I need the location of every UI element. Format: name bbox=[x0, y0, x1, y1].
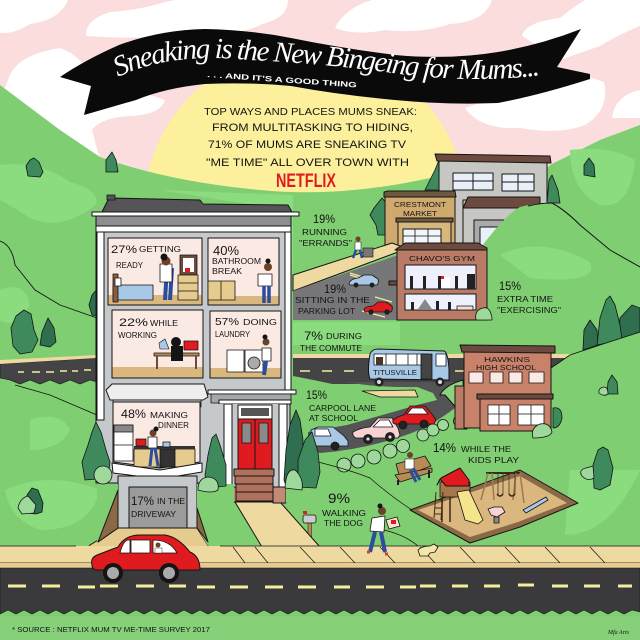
label: during the commute: THE COMMUTE bbox=[300, 344, 362, 353]
label: sitting in the parking lot bbox=[295, 282, 370, 316]
left pair of trees bbox=[11, 310, 56, 354]
room: while working: WORKING bbox=[118, 331, 157, 340]
lawn below road bbox=[293, 376, 551, 570]
playground sand bbox=[410, 470, 578, 543]
room: bathroom break: BREAK bbox=[212, 267, 243, 276]
intro text: "ME TIME" ALL OVER TOWN WITH bbox=[206, 157, 409, 169]
tree near the house roof on hill bbox=[106, 152, 118, 172]
garage door: IN THE bbox=[157, 497, 185, 506]
trees behind buildings bbox=[370, 155, 560, 235]
commute road right bbox=[293, 358, 573, 384]
cornice bbox=[92, 212, 299, 216]
building: Crestmont Market: CRESTMONT bbox=[394, 202, 447, 209]
garage door: 17% bbox=[131, 494, 154, 508]
porch pillars bbox=[224, 404, 287, 488]
room: getting ready: READY bbox=[116, 261, 144, 270]
clouds bbox=[0, 0, 640, 160]
intro text: 71% OF MUMS ARE SNEAKING TV bbox=[208, 139, 407, 151]
bay window shade bbox=[113, 400, 201, 407]
swing set bbox=[481, 473, 524, 503]
building: Crestmont Market: MARKET bbox=[403, 211, 438, 218]
label: carpool lane bbox=[306, 388, 376, 423]
porch wall bbox=[210, 404, 282, 488]
room: doing laundry bbox=[210, 311, 281, 378]
sidewalk bbox=[0, 546, 640, 563]
spring rider bbox=[488, 507, 505, 523]
label: running errands: "ERRANDS" bbox=[299, 239, 352, 248]
bay window cornice bbox=[106, 384, 208, 400]
tall trees far right bbox=[583, 296, 640, 350]
lighter grass patches bbox=[0, 149, 640, 535]
green lawn covering lower house wall edges bbox=[97, 484, 300, 546]
label: sitting in the parking lot: SITTING IN THE bbox=[295, 296, 370, 305]
small tree on right hill bbox=[584, 158, 595, 177]
walkway bbox=[362, 390, 418, 397]
source note: * SOURCE : NETFLIX MUM TV ME-TIME SURVEY 2017 bbox=[12, 625, 210, 634]
label: walking the dog bbox=[322, 490, 366, 528]
frieze trim bbox=[96, 226, 291, 232]
building: Chavo's Gym: CHAVO'S GYM bbox=[409, 256, 475, 263]
mailbox bbox=[303, 511, 316, 538]
parking lot bbox=[293, 255, 398, 320]
ridge line lower left bbox=[15, 385, 97, 415]
room: while working: 22% bbox=[119, 317, 148, 329]
right pillar bbox=[285, 232, 291, 390]
porch steps bbox=[234, 469, 274, 501]
seesaw bbox=[523, 497, 548, 513]
label: running errands: 19% bbox=[313, 212, 335, 226]
tree on right lawn bbox=[599, 375, 618, 395]
chimney stub bbox=[107, 195, 115, 200]
right green hill bbox=[479, 203, 640, 345]
hedge bbox=[337, 416, 464, 472]
label: carpool lane: CARPOOL LANE bbox=[309, 404, 376, 413]
lower left tree with bush bbox=[18, 488, 43, 514]
door transom bbox=[238, 405, 272, 419]
roof bbox=[102, 198, 292, 212]
room: while working: WHILE bbox=[150, 319, 178, 328]
bay window base bbox=[112, 463, 202, 479]
label: walking the dog: 9% bbox=[328, 490, 350, 506]
room: bathroom break: 40% bbox=[213, 243, 239, 258]
label: while the kids play: KIDS PLAY bbox=[468, 456, 520, 465]
room: making dinner bbox=[113, 402, 200, 468]
blue car in parking lot bbox=[349, 275, 378, 287]
dog bbox=[418, 544, 438, 556]
garage wall bbox=[118, 476, 197, 528]
building: Chavo's Gym bbox=[389, 243, 487, 320]
artist signature: Mfa Arts bbox=[607, 629, 630, 636]
main road bbox=[0, 568, 640, 614]
bottom grass band bbox=[0, 616, 640, 640]
driveway bbox=[76, 528, 220, 565]
commute road left bbox=[0, 355, 97, 384]
garage door: DRIVEWAY bbox=[131, 510, 177, 519]
room: getting ready: 27% bbox=[111, 244, 137, 256]
driveway slopes bbox=[98, 490, 208, 542]
building: Hawkins High School: HIGH SCHOOL bbox=[476, 365, 536, 372]
red car bbox=[92, 535, 200, 583]
red car in parking lot bbox=[364, 302, 392, 314]
shopper with cart bbox=[353, 236, 373, 258]
room: getting ready: GETTING bbox=[139, 244, 181, 254]
sun bbox=[144, 48, 466, 370]
label: extra time exercising bbox=[497, 279, 561, 315]
right hill outline bbox=[528, 203, 640, 267]
trees around the house bbox=[82, 410, 320, 488]
label: extra time exercising: EXTRA TIME bbox=[497, 295, 553, 304]
banner bbox=[60, 29, 590, 115]
building: Crestmont Market bbox=[384, 191, 456, 247]
intro text: FROM MULTITASKING TO HIDING, bbox=[212, 122, 413, 134]
label: running errands: RUNNING bbox=[302, 228, 347, 237]
label: walking the dog: THE DOG bbox=[324, 519, 363, 528]
title: Sneaking is the New Bingeing for Mums... bbox=[114, 38, 538, 83]
carpool cars bbox=[311, 406, 436, 450]
label: walking the dog: WALKING bbox=[322, 509, 366, 518]
label: sitting in the parking lot: 19% bbox=[324, 282, 346, 296]
room: doing laundry: DOING bbox=[243, 318, 277, 327]
label: carpool lane: 15% bbox=[306, 388, 327, 402]
building: office block bbox=[435, 154, 551, 250]
room: making dinner: MAKING bbox=[150, 410, 188, 420]
transom glass bbox=[241, 408, 269, 416]
label: during the commute: DURING bbox=[326, 332, 362, 341]
frieze bbox=[96, 216, 291, 226]
bush by school bbox=[532, 408, 562, 438]
sidewalk by parking lot bbox=[293, 243, 400, 291]
road centre dashes bbox=[8, 585, 632, 587]
bus Titusville bbox=[368, 349, 449, 386]
room: getting ready bbox=[108, 238, 202, 305]
left pillar bbox=[97, 232, 104, 420]
dark tree behind house bbox=[89, 288, 98, 316]
room: doing laundry: 57% bbox=[215, 316, 239, 328]
label: while the kids play bbox=[433, 440, 520, 465]
bush by gym bbox=[476, 308, 492, 320]
road kerb bbox=[293, 354, 573, 358]
label: while the kids play: 14% bbox=[433, 440, 456, 455]
room: bathroom break bbox=[208, 238, 279, 305]
driveway slopes front bbox=[98, 490, 208, 542]
room: making dinner: DINNER bbox=[158, 420, 189, 430]
road dashes bbox=[300, 370, 465, 372]
sky bbox=[0, 0, 640, 260]
curb bbox=[0, 563, 640, 568]
ridge line left bbox=[0, 241, 97, 318]
play structure bbox=[434, 468, 483, 524]
bus Titusville: TITUSVILLE bbox=[373, 370, 417, 377]
Netflix logo text: NETFLIX bbox=[276, 171, 336, 192]
house wall bbox=[96, 228, 290, 483]
patch on right hill bbox=[500, 246, 591, 280]
tree and bush beside playground bbox=[581, 447, 613, 490]
tree on far left hill bbox=[26, 158, 43, 177]
room: doing laundry: LAUNDRY bbox=[215, 330, 251, 339]
room: while working bbox=[112, 310, 203, 378]
building: Hawkins High School bbox=[440, 345, 555, 431]
right lawn ridge line bbox=[551, 332, 640, 368]
building: Hawkins High School: HAWKINS bbox=[484, 357, 530, 364]
pillar bases bbox=[224, 487, 286, 503]
label: extra time exercising: 15% bbox=[499, 279, 521, 293]
label: extra time exercising: "EXERCISING" bbox=[497, 306, 561, 315]
bench with person bbox=[395, 452, 432, 485]
walking woman with phone bbox=[367, 504, 418, 554]
subtitle: . . . AND IT'S A GOOD THING bbox=[207, 70, 357, 89]
parking lines bbox=[350, 273, 392, 317]
bushes around the house bbox=[94, 466, 302, 492]
house bbox=[92, 195, 299, 528]
label: while the kids play: WHILE THE bbox=[461, 445, 511, 454]
intro text: TOP WAYS AND PLACES MUMS SNEAK: bbox=[204, 107, 417, 118]
right lawn ridge bbox=[551, 332, 640, 470]
front path bbox=[235, 502, 320, 547]
title baseline path bbox=[118, 58, 548, 79]
label: carpool lane: AT SCHOOL bbox=[309, 414, 359, 423]
carpool road bbox=[308, 382, 460, 453]
garage door bbox=[129, 487, 187, 528]
label: during the commute bbox=[300, 329, 362, 353]
label: sitting in the parking lot: PARKING LOT bbox=[298, 307, 355, 316]
room: bathroom break: BATHROOM bbox=[212, 257, 261, 266]
red double door bbox=[238, 419, 272, 469]
porch cornice bbox=[208, 390, 296, 404]
label: during the commute: 7% bbox=[304, 329, 323, 343]
intro text bbox=[204, 107, 417, 169]
ridge line bbox=[318, 462, 470, 543]
label: running errands bbox=[299, 212, 352, 248]
room: making dinner: 48% bbox=[121, 407, 146, 421]
